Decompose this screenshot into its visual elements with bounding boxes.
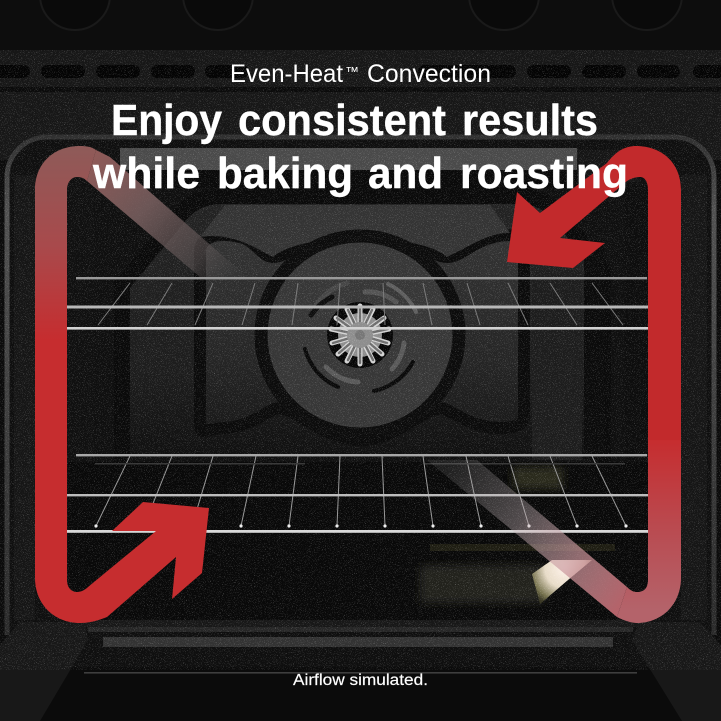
headline: baking	[217, 149, 353, 198]
headline: roasting	[460, 149, 628, 198]
subtitle: Even-Heat	[230, 60, 343, 88]
left red path with arrowhead	[35, 146, 209, 623]
cavity ceiling with vent slots	[0, 50, 721, 160]
arrow: right airflow path	[427, 146, 681, 623]
racks: upper and lower	[67, 277, 649, 533]
headline	[92, 96, 628, 198]
headline: results	[462, 96, 598, 145]
subtitle: ™	[345, 64, 359, 79]
right red path with arrowhead	[507, 146, 681, 440]
right red path bottom curve	[617, 440, 681, 623]
arrow: left airflow path	[35, 146, 247, 623]
left channel diagonal fading into the cavity	[87, 150, 247, 277]
headline: Enjoy	[111, 96, 222, 145]
headline: and	[368, 149, 443, 198]
top light bar	[120, 148, 678, 252]
right channel diagonal fading into the cavity	[427, 460, 627, 617]
headline: consistent	[238, 96, 446, 145]
upper oven rack	[67, 277, 649, 330]
oven back wall panel	[122, 196, 604, 470]
oven floor and door trim	[0, 620, 721, 721]
cavity interior	[7, 137, 714, 667]
subtitle: Convection	[367, 60, 491, 88]
side rack supports	[14, 175, 707, 620]
wavy plate with dark channel	[200, 232, 524, 440]
subtitle	[230, 60, 491, 88]
footnote: Airflow simulated.	[293, 672, 428, 689]
headline: while	[92, 149, 200, 198]
lower oven rack	[67, 454, 649, 533]
lower cavity and reflection	[68, 462, 648, 620]
fan blades	[327, 302, 393, 368]
fan assembly	[261, 236, 459, 434]
control panel band with knobs	[0, 0, 721, 50]
